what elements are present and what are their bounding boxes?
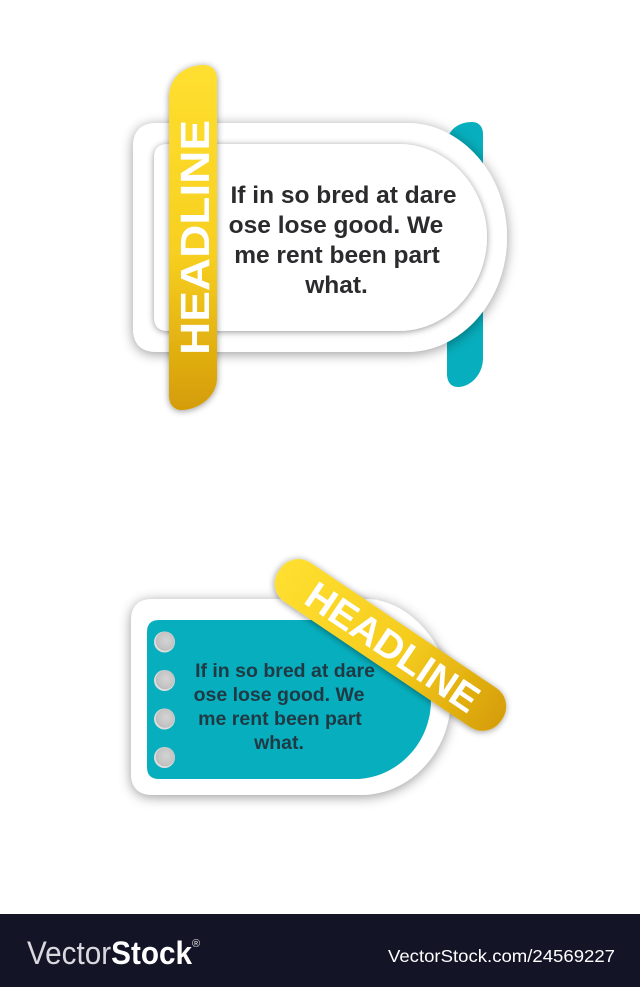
inner white card [154, 144, 487, 331]
body text [194, 660, 375, 754]
registered mark: ® [192, 938, 200, 950]
body text [229, 182, 456, 299]
teal card [147, 620, 431, 779]
panel: top label [133, 65, 507, 410]
punched holes [154, 632, 175, 768]
body text: If in so bred at dare [195, 660, 375, 682]
image id: VectorStock.com/24569227 [388, 946, 615, 966]
outer white card [133, 123, 507, 352]
body text: what. [253, 732, 304, 754]
body text: what. [304, 272, 368, 299]
body text: me rent been part [234, 242, 440, 269]
teal back strip [447, 122, 483, 387]
body text: me rent been part [198, 708, 362, 730]
yellow headline band [169, 65, 217, 410]
VectorStock logo: VectorStock [27, 935, 192, 971]
band headline: HEADLINE [172, 120, 218, 355]
yellow headline band [266, 551, 515, 739]
footer bar [0, 914, 640, 987]
body text: If in so bred at dare [230, 182, 456, 209]
panel: bottom label [131, 551, 515, 795]
band headline: HEADLINE [297, 574, 487, 722]
body text: ose lose good. We [229, 212, 443, 239]
outer white card [131, 599, 451, 795]
body text: ose lose good. We [194, 684, 365, 706]
